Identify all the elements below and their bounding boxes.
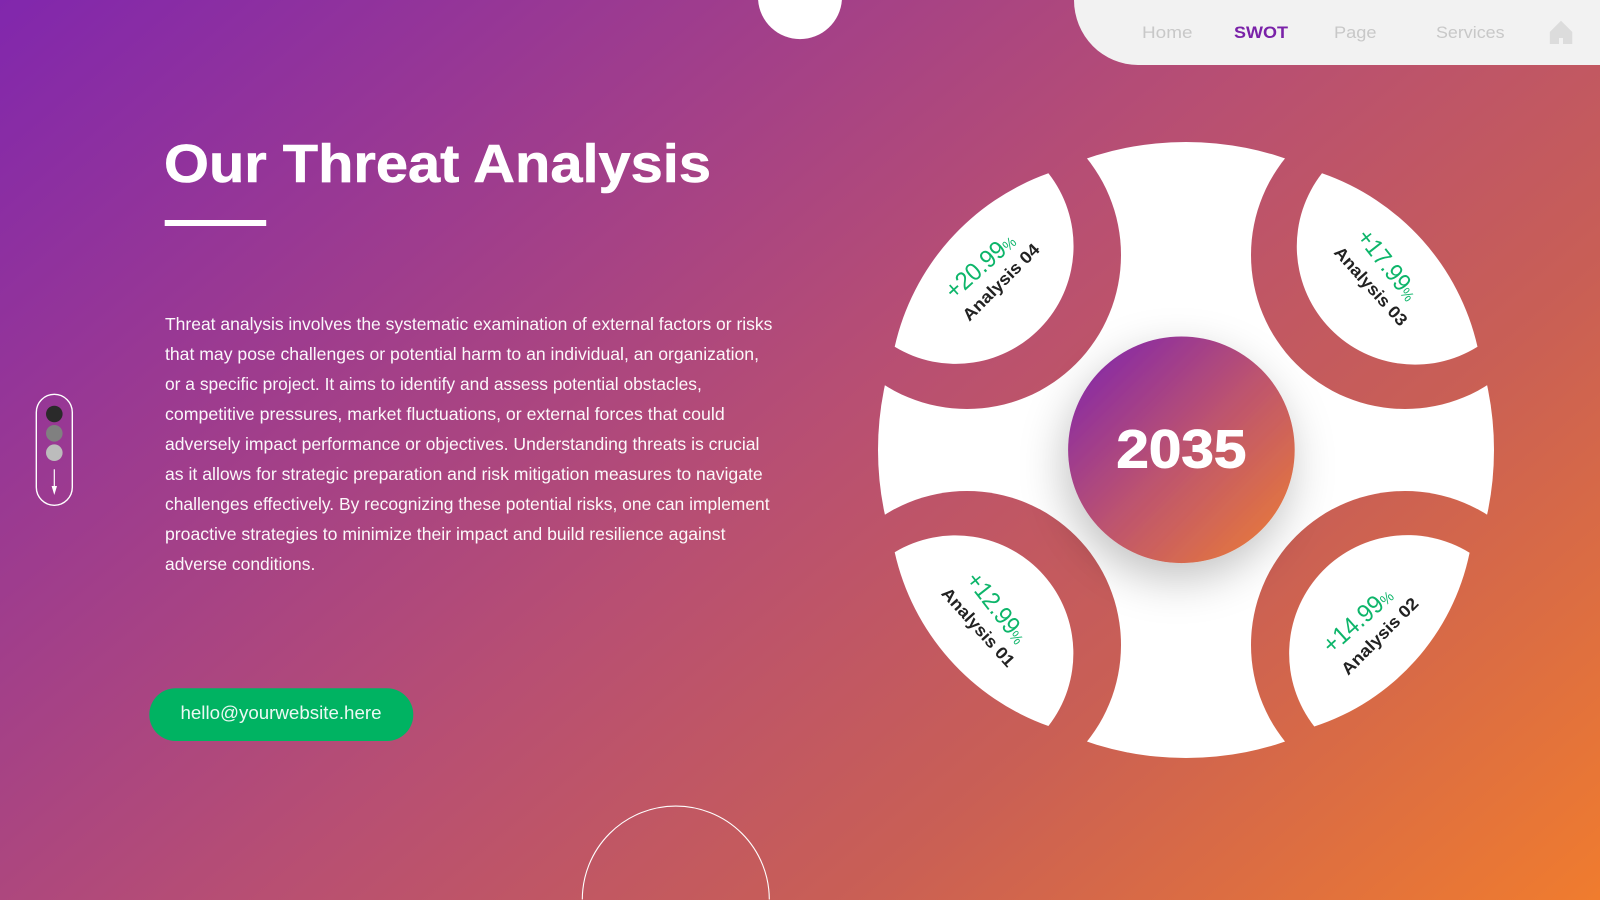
segment: Analysis 02: +14.99% [1317,582,1399,659]
center hub: 2035 [1116,420,1246,480]
title: Our Threat Analysis [164,134,711,194]
title underline [165,220,266,226]
segment: Analysis 04: Analysis 04 [959,240,1044,325]
body paragraph: challenges effectively. By recognizing these potential risks, one can implement [165,494,770,514]
segment: Analysis 03: +17.99% [1351,224,1424,306]
navigation bar: SWOT [1234,23,1289,42]
navigation bar: Services [1436,23,1504,42]
body paragraph: or a specific project. It aims to identify and assess potential obstacles, [165,374,702,394]
body paragraph [165,314,773,574]
decorative bottom circle outline [582,806,769,900]
body paragraph: as it allows for strategic preparation and risk mitigation measures to navigate [165,464,763,484]
body paragraph: that may pose challenges or potential harm to an individual, an organization, [165,344,759,364]
email button [149,688,413,741]
icon: home [1550,21,1572,44]
segment: Analysis 03 [1297,173,1478,365]
segment: Analysis 02: Analysis 02 [1338,594,1422,679]
email button: hello@yourwebsite.here [180,703,382,723]
arrow: scroll down [52,469,57,495]
decorative top circle [758,0,842,39]
body paragraph: adverse conditions. [165,554,315,574]
body paragraph: competitive pressures, market fluctuations, or external forces that could [165,404,725,424]
center hub [1068,336,1295,563]
body paragraph: proactive strategies to minimize their impact and build resilience against [165,524,726,544]
segment: Analysis 03: Analysis 03 [1330,243,1411,330]
segment: Analysis 02 [1289,535,1470,726]
wheel chart [878,142,1494,758]
segment: Analysis 01: Analysis 01 [938,584,1019,671]
body paragraph: adversely impact performance or objectives. Understanding threats is crucial [165,434,759,454]
navigation bar: Page [1334,23,1376,42]
body paragraph: Threat analysis involves the systematic examination of external factors or risks [165,314,773,334]
segment: Analysis 01: +12.99% [960,567,1033,649]
segment: Analysis 04 [895,173,1074,364]
navigation bar [1074,0,1600,65]
navigation bar: Home [1142,23,1192,42]
segment: Analysis 01 [895,535,1073,726]
scroll indicator [36,394,72,505]
segment: Analysis 04: +20.99% [940,227,1021,305]
wheel body with four circular cut-outs [878,142,1494,758]
